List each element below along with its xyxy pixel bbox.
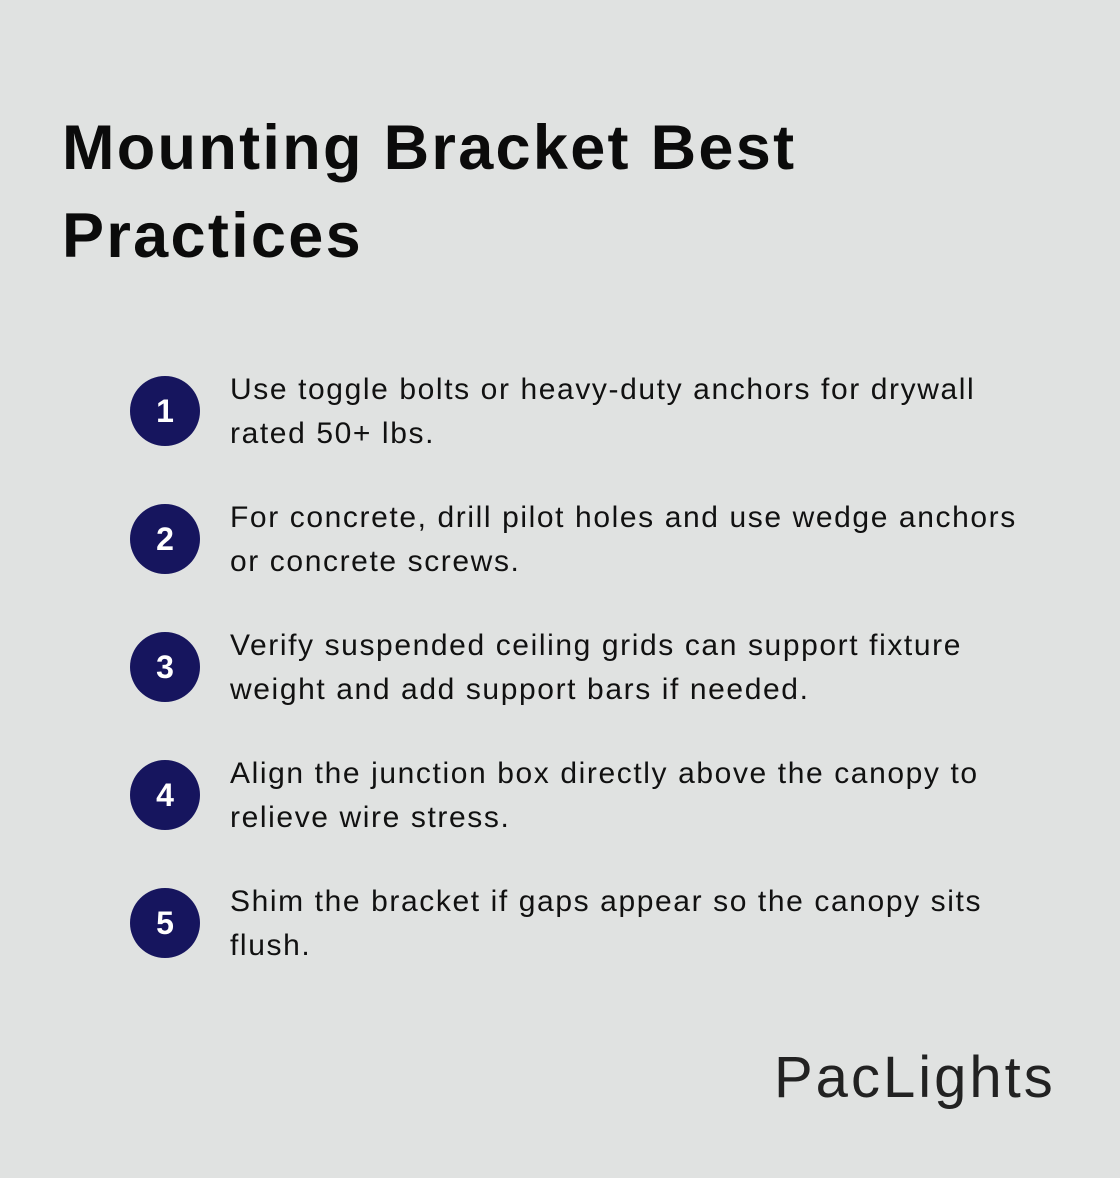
item 5: flush. <box>230 929 311 962</box>
item 4: relieve wire stress. <box>230 801 510 834</box>
item 1: Use toggle bolts or heavy-duty anchors for drywall <box>230 373 975 406</box>
item 5: Shim the bracket if gaps appear so the canopy sits <box>230 885 982 918</box>
logo: PacLights <box>774 1045 1056 1110</box>
item 1 <box>130 373 975 450</box>
item 5 <box>130 885 982 962</box>
item 2 <box>130 501 1017 578</box>
title: Mounting Bracket Best <box>62 113 796 183</box>
item 5: 5 <box>156 905 174 941</box>
item 3 <box>130 629 962 706</box>
item 4: 4 <box>156 777 174 813</box>
title <box>62 113 796 271</box>
item 2: or concrete screws. <box>230 545 520 578</box>
item 3: 3 <box>156 649 174 685</box>
item 4: Align the junction box directly above the canopy to <box>230 757 979 790</box>
title: Practices <box>62 201 363 271</box>
item 2: 2 <box>156 521 174 557</box>
item 2: For concrete, drill pilot holes and use wedge anchors <box>230 501 1017 534</box>
item 1: 1 <box>156 393 174 429</box>
item 3: weight and add support bars if needed. <box>230 673 810 706</box>
item 3: Verify suspended ceiling grids can support fixture <box>230 629 962 662</box>
item 1: rated 50+ lbs. <box>230 417 435 450</box>
item 4 <box>130 757 979 834</box>
